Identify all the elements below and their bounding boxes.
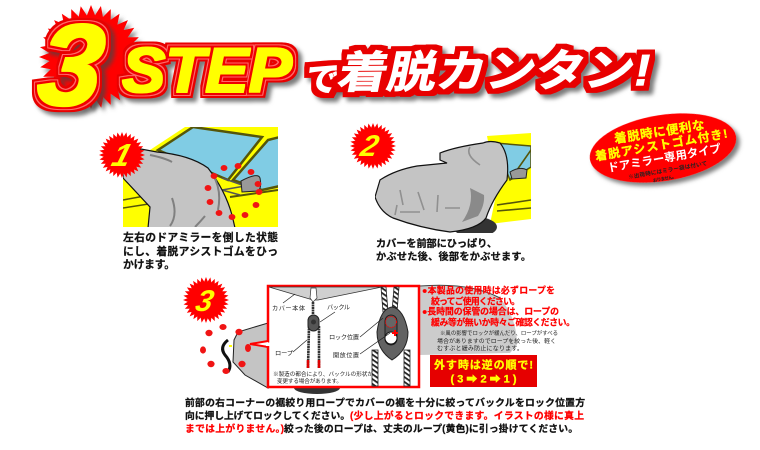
inset labels: 変更する場合があります。 bbox=[277, 377, 342, 385]
で: で bbox=[301, 61, 343, 99]
step 3 red dots bbox=[200, 324, 251, 374]
callout: removal order: (3➡2➡1) bbox=[450, 374, 517, 386]
cautions text: ●長時間の保管の場合は、ロープの bbox=[422, 306, 559, 316]
step 1 badge bbox=[95, 128, 149, 182]
small buckle and rope bbox=[308, 302, 319, 368]
inset labels: カバー本体 bbox=[272, 304, 306, 312]
step 3 text: 絞った後のロープは、丈夫のループ(黄色)に引っ掛けてください。 bbox=[284, 422, 578, 435]
cautions text bbox=[422, 284, 575, 352]
step 3 text: (少し上がるとロックできます。イラストの様に真上 bbox=[350, 409, 584, 422]
step 1 badge: 1 bbox=[108, 137, 136, 173]
inset labels: バックル bbox=[327, 304, 350, 312]
cautions text: 絞ってご使用ください。 bbox=[431, 296, 520, 306]
step 1 text bbox=[123, 230, 278, 271]
badge: assist rubber oval bbox=[585, 104, 741, 192]
step 3 text: 向に押し上げてロックしてください。 bbox=[185, 409, 350, 422]
badge: assist rubber oval: ドアミラー専用タイプ bbox=[606, 141, 723, 175]
着脱カンタン!: 着脱カンタン! bbox=[334, 47, 656, 98]
badge: assist rubber oval: 着脱アシストゴム付き! bbox=[594, 126, 729, 164]
inset leader lines bbox=[283, 294, 390, 354]
step 2 text: カバーを前部にひっぱり、 bbox=[376, 237, 497, 250]
big numeral 3: 3 bbox=[32, 0, 111, 130]
callout: removal order: 外す時は逆の順で! bbox=[434, 358, 533, 372]
step 1 red dots bbox=[205, 163, 262, 220]
inset labels: ※製造の都合により、バックルの形状が bbox=[273, 370, 373, 378]
large buckle and ropes bbox=[372, 287, 410, 386]
badge: assist rubber oval: おりません。 bbox=[652, 173, 677, 184]
cautions text: むすぶと緩み防止になります。 bbox=[437, 344, 523, 352]
inset labels: 開放位置 bbox=[333, 352, 359, 360]
panel: step 2 illustration bbox=[375, 133, 531, 237]
step 2 text: かぶせた後、後部をかぶせます。 bbox=[376, 250, 531, 263]
panel: buckle detail inset bbox=[250, 286, 419, 387]
step 3 text: までは上がりません。) bbox=[185, 422, 284, 435]
step 3 car illustration behind bbox=[223, 285, 517, 394]
step 1 text: 左右のドアミラーを倒した状態 bbox=[123, 230, 278, 244]
step 2 badge: 2 bbox=[356, 129, 382, 163]
cautions text: 場合がありますのでロープを絞った後、軽く bbox=[437, 337, 556, 345]
step 2 text bbox=[376, 237, 531, 263]
cautions text: ●本製品の使用時は必ずロープを bbox=[422, 284, 555, 296]
cautions text: 緩み等が無いか時々ご確認ください。 bbox=[431, 316, 575, 328]
step 1 text: かけます。 bbox=[123, 258, 175, 271]
inset labels: ロック位置 bbox=[329, 334, 359, 342]
step 2 badge bbox=[346, 119, 400, 173]
step 3 badge: 3 bbox=[192, 284, 217, 318]
cautions text: ※風の影響でロックが緩んだり、ロープがすべる bbox=[440, 329, 558, 337]
inset labels: ロープ bbox=[275, 350, 294, 358]
title: 3 STEP で着脱カンタン! bbox=[30, 0, 656, 130]
step 3 badge bbox=[179, 273, 233, 327]
title starburst bbox=[30, 0, 152, 118]
callout: removal order bbox=[430, 355, 537, 387]
step 3 text bbox=[185, 396, 585, 435]
STEP: STEP bbox=[122, 36, 293, 106]
step 3 text: 前部の右コーナーの裾絞り用ロープでカバーの裾を十分に絞ってバックルをロック位置方 bbox=[185, 396, 585, 409]
step 1 text: にし、着脱アシストゴムをひっ bbox=[123, 244, 278, 258]
badge: assist rubber oval: 着脱時に便利な bbox=[613, 117, 705, 146]
panel: step 1 illustration bbox=[123, 127, 280, 228]
badge: assist rubber oval: ※出荷時にはミラー袋は付いて bbox=[628, 159, 708, 181]
inset labels bbox=[272, 304, 373, 385]
